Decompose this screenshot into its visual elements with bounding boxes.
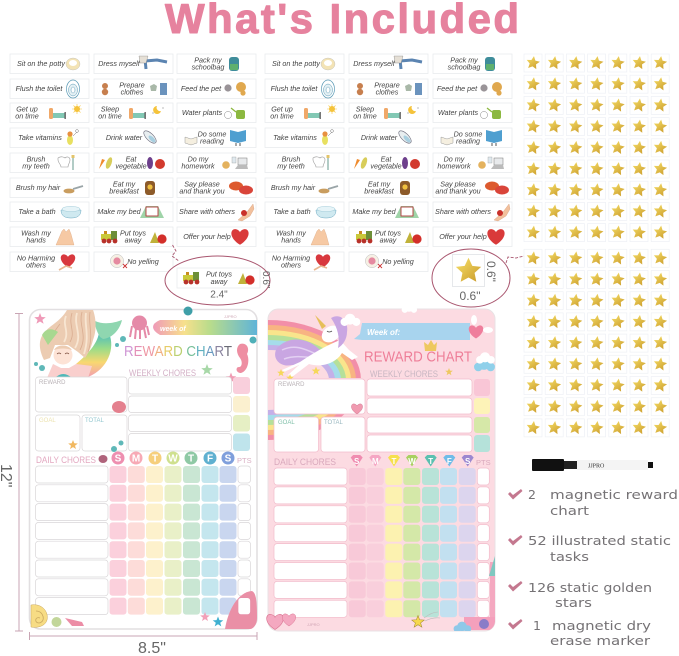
task: Flush the toilet: Flush the toilet [16, 84, 63, 93]
task: Prepare clothes: clothes [376, 88, 399, 96]
task: Do some reading [177, 128, 256, 148]
task: Do some reading: reading [456, 136, 480, 146]
task: No yelling [349, 252, 428, 272]
task: Eat my breakfast: breakfast [109, 186, 140, 196]
task: Eat my breakfast: Eat my [368, 180, 391, 188]
feature: 52 illustrated static tasks: 52 illustrated static [528, 533, 671, 548]
task: Share with others [433, 202, 512, 222]
task: Sit on the potty [10, 54, 89, 74]
task: Say please and thank you: and thank you [179, 186, 225, 196]
task: Water plants [177, 103, 256, 122]
feature: 126 static golden stars [508, 580, 652, 610]
task: Brush my teeth: Brush [282, 154, 300, 164]
task: Wash my hands [265, 227, 344, 246]
icon: shell [112, 401, 126, 413]
task: Sleep on time [349, 103, 428, 122]
weekday circles: W [168, 454, 178, 464]
task: Take vitamins: Take vitamins [273, 133, 317, 142]
task: No Harming others: No Harming [272, 254, 310, 262]
task: Make my bed: Make my bed [97, 207, 142, 216]
small brand label: JJPRO [224, 314, 237, 319]
task: Wash my hands: Wash my [276, 228, 306, 238]
task: Eat vegetable: vegetable [115, 162, 147, 170]
width dimension: 8.5 inch [30, 632, 257, 656]
feature: 52 illustrated static tasks: tasks [550, 549, 589, 564]
icon: clouds right [474, 352, 495, 371]
task: Offer your help [177, 227, 256, 246]
callout: task size 2.4 by 0.6 inch: 2.4" [210, 290, 228, 300]
task: Share with others [177, 202, 256, 222]
task: Pack my schoolbag: schoolbag [192, 62, 224, 72]
task: Get up on time [10, 103, 89, 122]
task: Do my homework: Do my [444, 154, 465, 164]
task: Flush the toilet: Flush the toilet [271, 84, 318, 93]
panel: task cards set 1 [10, 54, 256, 272]
weekday circles: S [225, 454, 232, 464]
task: Feed the pet [433, 79, 512, 98]
task: Offer your help: Offer your help [183, 232, 231, 241]
task: Feed the pet [177, 79, 256, 98]
daily chores grid [274, 468, 489, 617]
task: Eat vegetable: Eat [126, 154, 137, 164]
task: Do some reading [433, 128, 512, 148]
task: Pack my schoolbag [177, 54, 256, 74]
task: Make my bed: Make my bed [352, 207, 397, 216]
task: Eat my breakfast [94, 178, 173, 198]
icon: small star [445, 368, 453, 375]
decorative stars and bubbles [34, 306, 256, 382]
task: Take vitamins: Take vitamins [18, 133, 62, 142]
illustration: rainbow and unicorn [268, 315, 361, 440]
box: reward [274, 379, 365, 414]
task: Take a bath: Take a bath [273, 207, 311, 216]
task: Drink water: Drink water [106, 133, 143, 142]
task: Brush my hair: Brush my hair [16, 183, 61, 192]
weekday gems: T [392, 457, 397, 466]
task: Brush my hair [10, 178, 89, 198]
box: reward: REWARD [39, 380, 66, 386]
task: Do some reading: reading [200, 136, 224, 146]
task: Sleep on time [94, 103, 173, 122]
task: Dress myself: Dress myself [353, 59, 396, 68]
task: Sit on the potty [265, 54, 344, 74]
box: total: TOTAL [85, 418, 104, 424]
task: Prepare clothes: Prepare [374, 80, 400, 90]
task: Take a bath [265, 202, 344, 222]
icon: cloud top [341, 314, 360, 326]
task: Say please and thank you: and thank you [435, 186, 481, 196]
task: Dress myself [94, 54, 173, 74]
box: goal: GOAL [39, 418, 56, 424]
box: total [321, 417, 365, 452]
task: No yelling: No yelling [127, 257, 159, 266]
task: Eat vegetable [94, 153, 173, 172]
icon: cloud top centre [402, 303, 417, 313]
task: Take vitamins [10, 128, 89, 148]
feature: 52 illustrated static tasks [508, 533, 671, 564]
task: Put toys away: away [125, 236, 142, 244]
icon: winged heart [469, 315, 493, 338]
task: Put toys away: away [380, 236, 397, 244]
marker [532, 459, 653, 471]
task: Sleep on time: Sleep [101, 104, 119, 114]
task: Brush my teeth [265, 153, 344, 172]
panel: golden star stickers [524, 54, 669, 437]
weekday gems [351, 455, 474, 466]
illustration: castle [454, 556, 495, 632]
task: Say please and thank you: Say please [440, 180, 476, 188]
icon: pink heart [351, 404, 363, 414]
task: Take a bath [10, 202, 89, 222]
icon: hearts bottom left [267, 614, 296, 630]
task: Brush my hair: Brush my hair [271, 183, 316, 192]
task: Feed the pet: Feed the pet [437, 84, 478, 93]
task: Put toys away [94, 227, 173, 246]
task: Drink water: Drink water [361, 133, 398, 142]
task: Eat my breakfast: breakfast [364, 186, 395, 196]
task: Sit on the potty: Sit on the potty [272, 59, 320, 68]
week-of banner [153, 320, 257, 335]
callout: task size 2.4 by 0.6 inch: Put toys [206, 270, 232, 278]
feature: 126 static golden stars: 126 static golden [528, 580, 652, 595]
panel: mermaid reward chart [30, 306, 257, 629]
task: Water plants [433, 103, 512, 122]
feature list [508, 487, 678, 648]
callout: task size 2.4 by 0.6 inch [165, 245, 271, 305]
task: Feed the pet: Feed the pet [181, 84, 222, 93]
box: reward [36, 377, 127, 412]
weekday circles: T [188, 454, 194, 464]
box: goal [274, 417, 318, 452]
task: No Harming others: No Harming [17, 254, 55, 262]
task: No Harming others [265, 252, 344, 272]
weekday circles [112, 452, 234, 464]
task: Pack my schoolbag: schoolbag [448, 62, 480, 72]
task: Say please and thank you [433, 178, 512, 198]
task: Eat my breakfast: Eat my [113, 180, 136, 188]
marker: JJPRO [588, 464, 605, 470]
task: Flush the toilet [265, 79, 344, 98]
weekly chore rows [367, 379, 490, 452]
task: Do some reading: Do some [454, 130, 482, 138]
feature: 2 magnetic reward chart [508, 487, 678, 518]
task: Eat vegetable: vegetable [370, 162, 402, 170]
heading: reward chart: REWARD CHART [364, 348, 472, 366]
task: Share with others: Share with others [435, 207, 491, 216]
task: No yelling: No yelling [382, 257, 414, 266]
task: Prepare clothes [94, 79, 173, 98]
task: Brush my teeth: my teeth [277, 162, 305, 170]
feature: 1 magnetic dry erase marker [508, 618, 652, 648]
week-of banner [354, 323, 470, 340]
task: Prepare clothes: clothes [121, 88, 144, 96]
task: Take vitamins [265, 128, 344, 148]
task: Offer your help [433, 227, 512, 246]
task: Flush the toilet [10, 79, 89, 98]
weekday gems: S [465, 457, 471, 466]
task: Make my bed [349, 202, 428, 222]
task: Water plants: Water plants [182, 108, 223, 117]
task: Brush my hair [265, 178, 344, 198]
task: Pack my schoolbag [433, 54, 512, 74]
box: goal: GOAL [278, 420, 295, 426]
task: Prepare clothes [349, 79, 428, 98]
icon: octopus [130, 316, 149, 339]
weekday gems: W [408, 457, 416, 466]
callout: star size 0.6 inch [432, 249, 524, 307]
task: Sit on the potty: Sit on the potty [17, 59, 65, 68]
task: Dress myself: Dress myself [98, 59, 141, 68]
weekly chore rows [128, 377, 250, 451]
task: Make my bed [94, 202, 173, 222]
task: Do some reading: Do some [198, 130, 226, 138]
box: total: TOTAL [324, 420, 343, 426]
task: Offer your help: Offer your help [439, 232, 487, 241]
heading: weekly chores: WEEKLY CHORES [370, 369, 438, 380]
weekday circles: T [152, 454, 158, 464]
panel: unicorn reward chart [266, 308, 496, 632]
task: Sleep on time: on time [98, 112, 122, 120]
task: Say please and thank you [177, 178, 256, 198]
small brand label: JJPRO [307, 622, 320, 627]
icons on boxes [68, 440, 124, 452]
points label: PTS [476, 458, 491, 467]
feature: 126 static golden stars: stars [555, 595, 592, 610]
task: Put toys away: Put toys [120, 228, 146, 238]
task: Sleep on time: on time [353, 112, 377, 120]
task: Do my homework: homework [181, 162, 215, 170]
task: Water plants: Water plants [438, 108, 479, 117]
task: Do my homework [433, 153, 512, 172]
task: Say please and thank you: Say please [184, 180, 220, 188]
feature: 2 magnetic reward chart: 2 [528, 487, 536, 502]
weekday circles: S [115, 454, 122, 464]
week-of banner: week of [160, 326, 186, 333]
box: reward: REWARD [278, 382, 305, 388]
illustration: mermaid [40, 310, 122, 378]
task: No Harming others: others [281, 260, 301, 270]
icon: crown [424, 340, 437, 351]
task: Get up on time: Get up [271, 104, 293, 114]
task: Wash my hands: Wash my [21, 228, 51, 238]
task: Dress myself [349, 54, 428, 74]
feature: 1 magnetic dry erase marker: magnetic dry [552, 618, 652, 633]
task: Brush my teeth: Brush [27, 154, 45, 164]
points label: PTS [237, 456, 252, 465]
heading: weekly chores: WEEKLY CHORES [129, 368, 196, 379]
weekday gems: S [354, 457, 360, 466]
task: Pack my schoolbag: Pack my [450, 56, 478, 64]
height dimension: 12 inch [0, 314, 23, 631]
task: Get up on time [265, 103, 344, 122]
task: Do my homework: homework [437, 162, 471, 170]
feature: 2 magnetic reward chart: chart [550, 503, 589, 518]
task: Get up on time: on time [15, 112, 39, 120]
box: goal [36, 415, 80, 451]
task: No Harming others: others [26, 260, 46, 270]
task: Get up on time: Get up [16, 104, 38, 114]
weekday circles: M [132, 454, 140, 464]
weekday gems: T [428, 457, 433, 466]
task: Eat vegetable [349, 153, 428, 172]
icon: small shell [98, 455, 108, 463]
task: Share with others: Share with others [179, 207, 235, 216]
task: Put toys away [349, 227, 428, 246]
task: Pack my schoolbag: Pack my [194, 56, 222, 64]
feature: 1 magnetic dry erase marker: 1 [533, 618, 541, 633]
daily chores grid [36, 466, 250, 615]
task: Wash my hands [10, 227, 89, 246]
task: Drink water [94, 128, 173, 148]
task: No Harming others [10, 252, 89, 272]
callout: task size 2.4 by 0.6 inch: away [211, 277, 228, 286]
callout: star size 0.6 inch: 0.6" [484, 261, 498, 282]
weekday gems: M [372, 457, 379, 466]
task: Wash my hands: hands [26, 236, 46, 244]
callout: star size 0.6 inch: 0.6" [460, 289, 480, 303]
box: total [82, 415, 127, 451]
task: Prepare clothes: Prepare [119, 80, 145, 90]
heading: daily chores: DAILY CHORES [36, 455, 96, 465]
task: Take a bath: Take a bath [18, 207, 56, 216]
task: Eat vegetable: Eat [381, 154, 392, 164]
icon: shooting star [412, 612, 440, 627]
heading: daily chores: DAILY CHORES [274, 457, 336, 468]
task: Put toys away: Put toys [375, 228, 401, 238]
task: Drink water [349, 128, 428, 148]
bottom shells and octopus decoration [31, 591, 257, 629]
task: Wash my hands: hands [281, 236, 301, 244]
panel: task cards set 2 [265, 54, 512, 272]
week-of banner: Week of: [367, 328, 401, 337]
feature: 1 magnetic dry erase marker: erase marker [550, 633, 651, 648]
heading: reward chart: REWARD CHART [124, 343, 232, 360]
task: Eat my breakfast [349, 178, 428, 198]
callout: task size 2.4 by 0.6 inch: 0.6" [260, 271, 271, 289]
task: Get up on time: on time [270, 112, 294, 120]
task: Do my homework [177, 153, 256, 172]
icon: seahorse [237, 344, 248, 373]
weekday gems: F [447, 457, 452, 466]
feature: 2 magnetic reward chart: magnetic reward [550, 487, 678, 502]
task: Sleep on time: Sleep [356, 104, 374, 114]
task: Brush my teeth [10, 153, 89, 172]
task: No yelling [94, 252, 173, 272]
task: Do my homework: Do my [188, 154, 209, 164]
task: Brush my teeth: my teeth [22, 162, 50, 170]
weekday circles: F [207, 454, 213, 464]
